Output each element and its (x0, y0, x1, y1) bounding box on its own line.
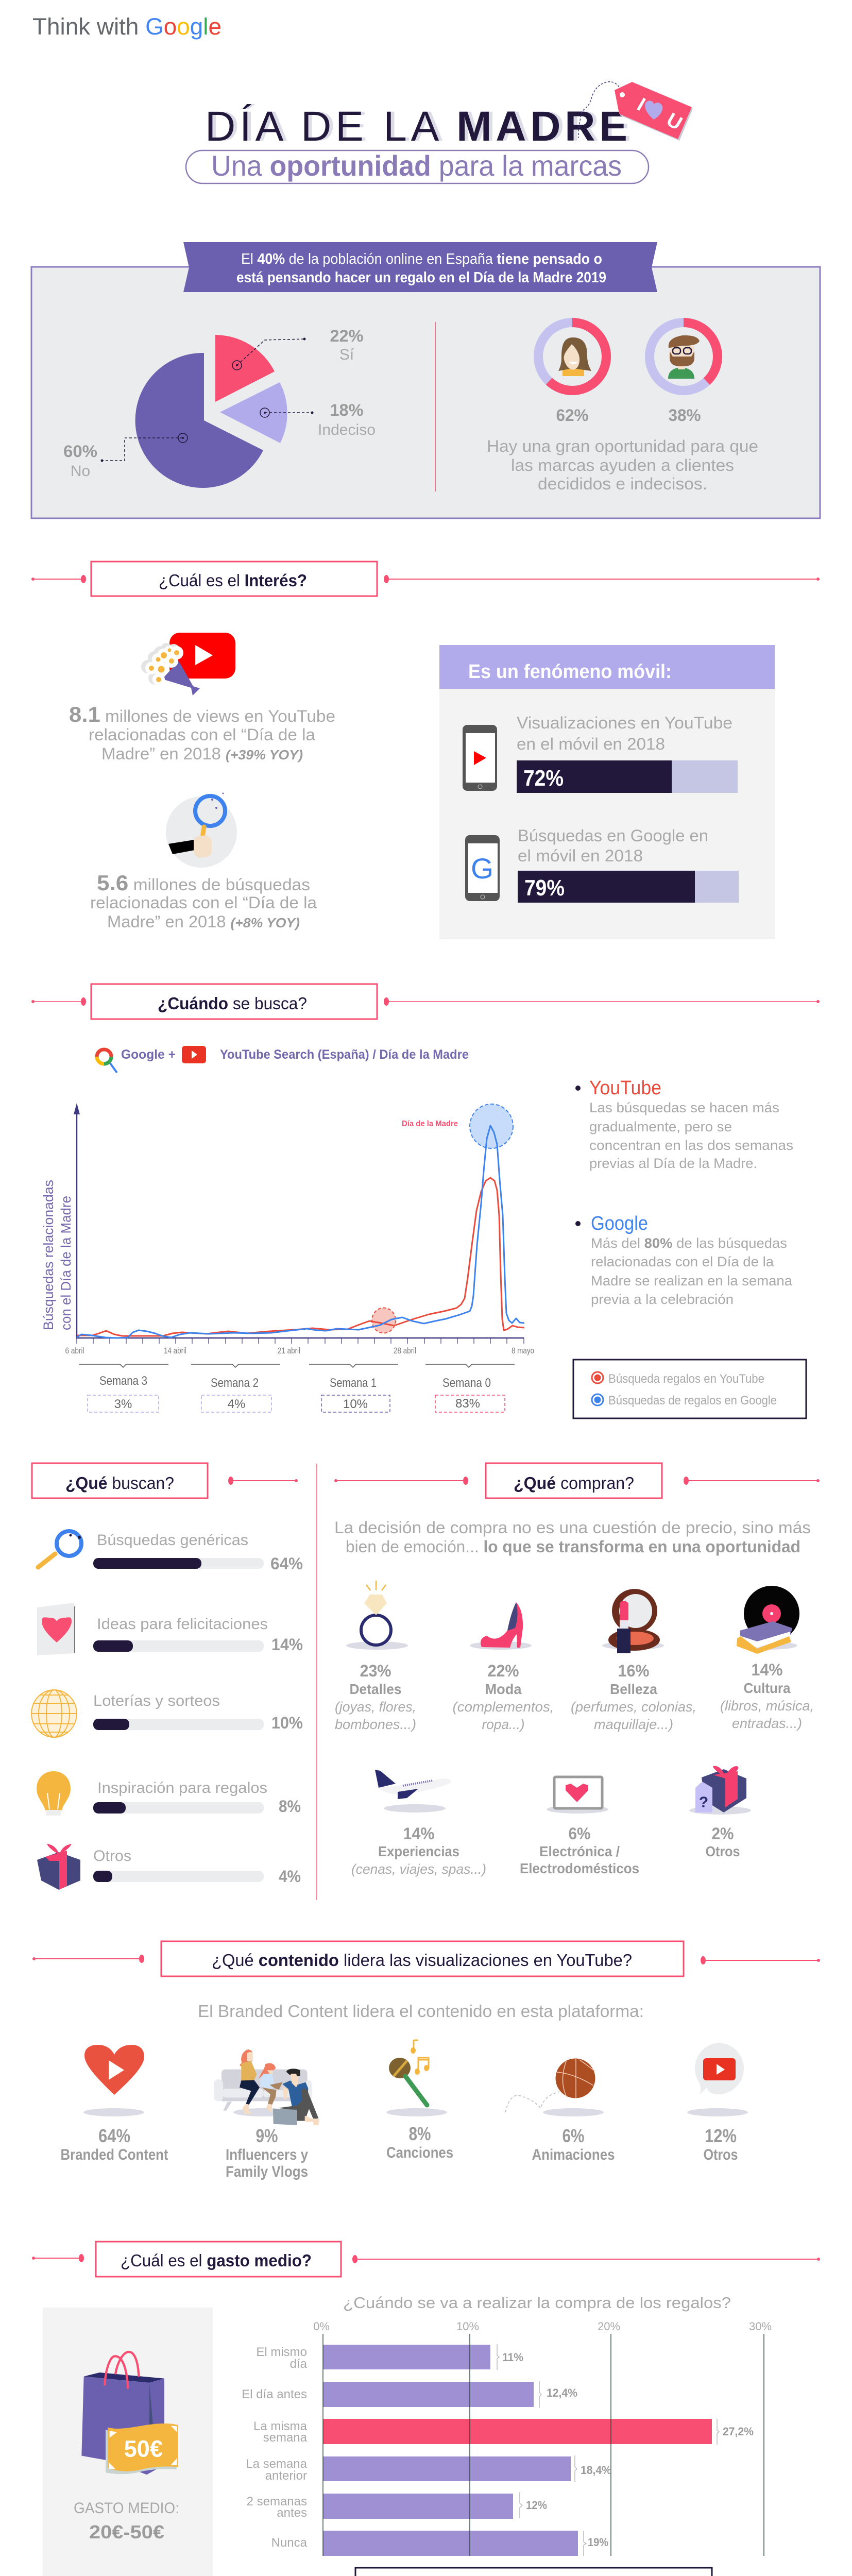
item: moda: ropa...) (482, 1717, 524, 1732)
panel: fenómeno móvil: Es un fenómeno móvil: (468, 661, 672, 683)
legend: Búsqueda regalos en YouTube (608, 1372, 764, 1386)
banner: está pensando hacer un regalo en el Día de la Madre 2019 (236, 269, 606, 286)
text: 5.6 millones (90, 871, 317, 931)
text: opportunity: las marcas ayuden a clientes (511, 456, 734, 474)
bar chart: cuándo compra: 11% (502, 2351, 523, 2364)
heading: interés: ¿Cuál es el Interés? (159, 571, 307, 590)
bar chart: cuándo compra: 30% (749, 2320, 772, 2333)
icon: gift tag (578, 82, 693, 141)
item: otros regalo: Otros (706, 1843, 740, 1859)
text: decisión de compra: bien de emoción... lo que se transforma en una oportunidad (346, 1537, 800, 1556)
item: branded content: 64% (98, 2125, 130, 2146)
text and bar: google 79%: el móvil en 2018 (518, 846, 643, 865)
text: youtube: gradualmente, pero se (589, 1119, 732, 1134)
heading: cuándo: ¿Cuándo se busca? (158, 994, 307, 1013)
text: 8.1 millones: 8.1 millones de views en YouTube (69, 702, 335, 726)
row: ideas felicitaciones: Ideas para felicitaciones (97, 1616, 268, 1633)
text: youtube (575, 1077, 793, 1171)
line chart (65, 1103, 534, 1355)
item: branded content (61, 2045, 168, 2163)
text and bar: google 79%: Búsquedas en Google en (518, 826, 708, 845)
item: influencers (214, 2049, 319, 2180)
pie labels: No (71, 463, 90, 480)
text: youtube: YouTube (589, 1077, 661, 1099)
bar chart: cuándo compra: antes (277, 2506, 307, 2520)
item: cultura: 14% (751, 1660, 783, 1679)
row: loterías (31, 1690, 303, 1737)
pie labels: 60% (63, 442, 97, 461)
callout: semanas (355, 2568, 712, 2576)
item: detalles: (joyas, flores, (335, 1699, 416, 1715)
pie labels: 22% (330, 327, 364, 345)
y axis title: con el Día de la Madre (58, 1196, 74, 1330)
title: DÍA DE LA MADRE (205, 103, 627, 150)
line chart: Día de la Madre (402, 1120, 458, 1128)
text: google (575, 1213, 793, 1307)
banner: El 40% de la población online en España tiene pensado o (241, 251, 602, 267)
text: google: Madre se realizan en la semana (591, 1273, 793, 1289)
text: youtube: previas al Día de la Madre. (589, 1156, 757, 1171)
item: experiencias: 14% (403, 1824, 435, 1843)
pie chart (101, 335, 313, 488)
ring: woman 62% (538, 323, 606, 391)
item: belleza: maquillaje...) (594, 1717, 673, 1732)
bar chart: cuándo compra: anterior (265, 2469, 307, 2483)
text and bar: youtube 72%: en el móvil en 2018 (517, 735, 665, 753)
weeks: Semana 3 (99, 1374, 147, 1388)
item: animaciones: 6% (563, 2125, 584, 2146)
text and bar: youtube 72%: Visualizaciones en YouTube (517, 714, 732, 732)
text: opportunity: Hay una gran oportunidad para que (487, 437, 758, 455)
item: electrónica: Electrónica / (539, 1843, 620, 1859)
text: google: previa a la celebración (591, 1292, 734, 1307)
item: moda: 22% (487, 1662, 519, 1680)
bar chart: cuándo compra: día (290, 2357, 308, 2371)
item: cultura: (libros, música, (720, 1698, 814, 1714)
icon: youtube bouquet (141, 633, 235, 696)
ring percent labels: 62% (556, 406, 588, 425)
title block: DÍA DE LA MADRE (209, 103, 631, 150)
y axis title: Búsquedas relacionadas (41, 1180, 56, 1330)
icon: shopping bag: 50€ (124, 2435, 163, 2462)
item: animaciones (505, 2059, 615, 2163)
item: belleza: 16% (618, 1662, 649, 1680)
weeks: Semana 0 (442, 1376, 491, 1390)
text: 8.1 millones (69, 702, 335, 763)
item: otros youtube (687, 2043, 748, 2163)
ring: man 38% (650, 323, 718, 391)
bar chart: cuándo compra: El día antes (242, 2387, 307, 2401)
row: inspiración (37, 1771, 301, 1816)
item: detalles: 23% (360, 1662, 391, 1680)
bar chart: cuándo compra (242, 2320, 772, 2556)
item: moda (452, 1602, 554, 1732)
bar chart: cuándo compra: La semana (246, 2457, 308, 2471)
weeks: 4% (228, 1397, 245, 1411)
phone youtube (463, 725, 497, 791)
item: otros youtube: 12% (705, 2125, 737, 2146)
item: moda: Moda (485, 1681, 522, 1697)
text and bar: youtube 72% (517, 714, 738, 793)
legend: Búsquedas de regalos en Google (608, 1394, 777, 1408)
row: loterías: 10% (271, 1714, 303, 1732)
heading: cuándo (31, 984, 820, 1019)
item: otros regalo (689, 1766, 751, 1859)
heading: qué compran: ¿Qué compran? (514, 1473, 634, 1493)
panel: gasto medio: 20€-50€ (89, 2521, 164, 2543)
item: influencers: Influencers y (226, 2146, 308, 2163)
text: branded content intro: El Branded Content lidera el contenido en esta plataforma: (198, 2002, 644, 2021)
item: branded content: Branded Content (61, 2146, 168, 2163)
line chart: 21 abril (278, 1346, 300, 1355)
pie labels: 18% (330, 401, 364, 419)
row: inspiración: 8% (279, 1797, 301, 1816)
weeks: 10% (343, 1397, 368, 1411)
row: búsquedas genéricas: Búsquedas genéricas (97, 1532, 248, 1549)
weeks: Semana 1 (330, 1376, 377, 1390)
item: belleza (571, 1589, 696, 1732)
row: búsquedas genéricas (38, 1531, 303, 1573)
row: otros: 4% (279, 1867, 301, 1886)
item: canciones: 8% (409, 2123, 431, 2144)
item: cultura: entradas...) (732, 1716, 802, 1731)
text: 8.1 millones: Madre” en 2018 (+39% YOY) (101, 744, 303, 763)
panel: intro (31, 242, 820, 518)
text: youtube: Las búsquedas se hacen más (589, 1100, 779, 1115)
logo: Think with Google: Think with Google (32, 13, 221, 40)
line chart: 14 abril (164, 1346, 186, 1355)
line chart: 6 abril (65, 1346, 84, 1355)
ring percent labels (556, 406, 701, 425)
item: moda: (complementos, (452, 1699, 554, 1715)
pie labels: Sí (339, 346, 354, 363)
banner (183, 242, 657, 292)
item: experiencias: (cenas, viajes, spas...) (351, 1861, 486, 1877)
item: detalles: bombones...) (335, 1717, 416, 1732)
panel: gasto medio: GASTO MEDIO: (74, 2500, 179, 2517)
item: animaciones: Animaciones (532, 2146, 615, 2163)
weeks: 83% (455, 1397, 480, 1411)
phone google: G (471, 852, 493, 885)
text: google: relacionadas con el Día de la (591, 1254, 774, 1269)
item: experiencias: Experiencias (378, 1843, 459, 1859)
row: otros (37, 1844, 301, 1890)
heading: gasto medio (32, 2242, 820, 2277)
line chart: 28 abril (394, 1346, 416, 1355)
title: cuándo compra: ¿Cuándo se va a realizar la compra de los regalos? (343, 2294, 731, 2312)
item: electrónica: 6% (569, 1824, 590, 1843)
pie labels (63, 327, 376, 480)
subtitle pill: Una oportunidad para la marcas (211, 149, 622, 182)
item: detalles: Detalles (349, 1681, 402, 1697)
icon: shopping bag (81, 2352, 178, 2475)
panel: gasto medio (43, 2308, 213, 2576)
panel: fenómeno móvil (439, 645, 775, 939)
text: 5.6 millones: Madre” en 2018 (+8% YOY) (107, 912, 300, 931)
item: influencers: 9% (255, 2125, 278, 2146)
text: opportunity (487, 437, 758, 493)
row: otros: Otros (93, 1848, 131, 1865)
text: 5.6 millones: relacionadas con el “Día de la (90, 893, 317, 912)
text: google: Google (591, 1213, 648, 1234)
y axis title (41, 1180, 74, 1330)
chart header: google + youtube search: YouTube Search (España) / Día de la Madre (220, 1047, 469, 1062)
item: canciones: Canciones (386, 2144, 453, 2161)
bar chart: cuándo compra: semana (263, 2431, 308, 2445)
legend (573, 1360, 806, 1418)
text and bar: google 79% (518, 826, 739, 903)
text: 8.1 millones: relacionadas con el “Día de la (89, 725, 315, 744)
weeks (79, 1364, 515, 1412)
heading: qué contenido: ¿Qué contenido lidera las visualizaciones en YouTube? (212, 1951, 632, 1970)
item: detalles (335, 1581, 416, 1732)
bar chart: cuándo compra: 27,2% (723, 2425, 754, 2438)
bar chart: cuándo compra: 0% (313, 2320, 330, 2333)
text: decisión de compra: La decisión de compra no es una cuestión de precio, sino más (334, 1518, 811, 1537)
text: 5.6 millones: 5.6 millones de búsquedas (97, 871, 310, 895)
heading: qué contenido (32, 1941, 820, 1976)
chart header: google + youtube search (97, 1046, 469, 1073)
icon: magnifier hand (166, 792, 237, 868)
row: búsquedas genéricas: 64% (270, 1554, 303, 1573)
row: ideas felicitaciones: 14% (271, 1635, 303, 1654)
ring percent labels: 38% (669, 406, 701, 425)
bar chart: cuándo compra: Nunca (271, 2536, 308, 2550)
item: belleza: Belleza (610, 1681, 657, 1697)
bar chart: cuándo compra: La misma (253, 2419, 308, 2433)
bar chart: cuándo compra: 2 semanas (247, 2495, 307, 2509)
text and bar: youtube 72%: 72% (523, 766, 564, 791)
line chart: 8 mayo (512, 1346, 534, 1355)
text: opportunity: decididos e indecisos. (538, 474, 707, 493)
bar chart: cuándo compra: 19% (588, 2536, 608, 2549)
icon: gift tag: U (662, 109, 686, 135)
phone google (465, 835, 500, 901)
pie labels: Indeciso (318, 421, 376, 438)
chart header: google + youtube search: Google + (121, 1047, 176, 1062)
weeks: Semana 2 (211, 1376, 259, 1390)
icon: gift tag: I (634, 94, 649, 115)
item: cultura (720, 1586, 814, 1731)
item: electrónica (520, 1777, 639, 1876)
heading: qué buscan: ¿Qué buscan? (65, 1473, 174, 1493)
row: ideas felicitaciones (37, 1603, 303, 1655)
bar chart: cuándo compra: 12,4% (547, 2386, 577, 2399)
text: decisión de compra (334, 1518, 811, 1556)
heading: gasto medio: ¿Cuál es el gasto medio? (121, 2251, 312, 2270)
item: electrónica: Electrodomésticos (520, 1860, 639, 1876)
bar chart: cuándo compra: 20% (598, 2320, 620, 2333)
weeks: 3% (114, 1397, 132, 1411)
item: influencers: Family Vlogs (226, 2163, 308, 2180)
heading: interés (31, 562, 820, 596)
bar chart: cuándo compra: 12% (526, 2499, 547, 2512)
text: youtube: concentran en las dos semanas (589, 1138, 793, 1153)
item: belleza: (perfumes, colonias, (571, 1699, 696, 1715)
item: cultura: Cultura (744, 1680, 791, 1696)
text and bar: google 79%: 79% (524, 875, 565, 901)
item: canciones (386, 2040, 453, 2161)
row: inspiración: Inspiración para regalos (97, 1780, 267, 1797)
bar chart: cuándo compra: 18,4% (581, 2464, 611, 2477)
title block (186, 82, 693, 183)
heading: qué compran (334, 1463, 820, 1498)
heading: qué buscan (32, 1463, 298, 1498)
item: experiencias (351, 1770, 486, 1877)
bar chart: cuándo compra: 10% (456, 2320, 479, 2333)
item: otros regalo: 2% (712, 1824, 734, 1843)
row: loterías: Loterías y sorteos (93, 1692, 220, 1709)
item: otros youtube: Otros (704, 2146, 738, 2163)
text: google: Más del 80% de las búsquedas (591, 1235, 787, 1251)
bar chart: cuándo compra: El mismo (256, 2345, 307, 2359)
item: otros regalo: ? (699, 1794, 708, 1811)
